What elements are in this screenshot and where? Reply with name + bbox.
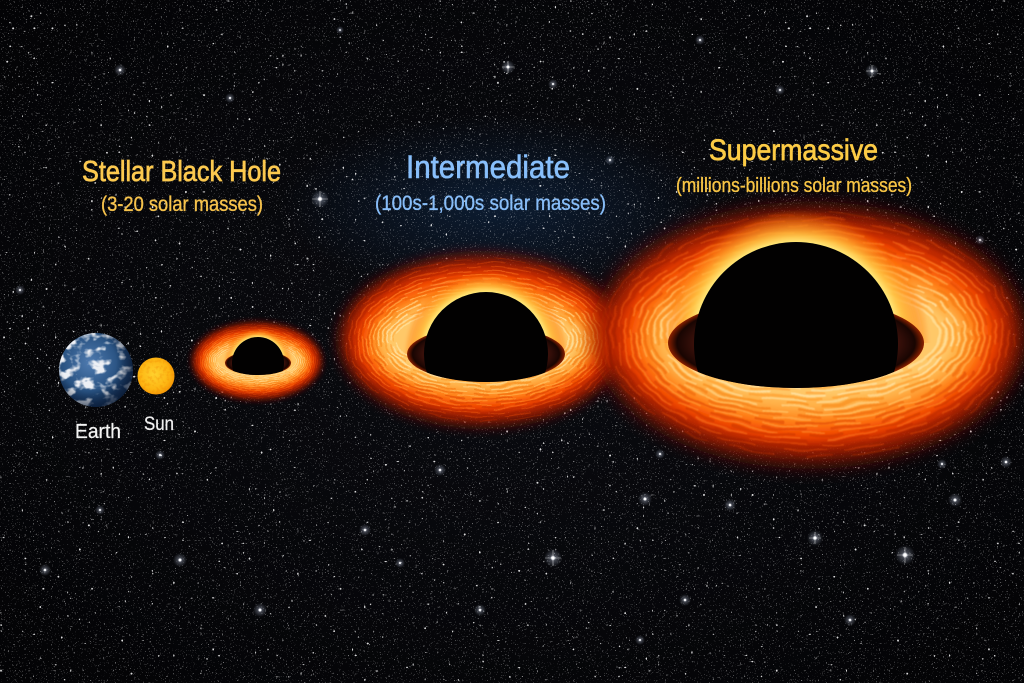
subheading: stellar mass range: (3-20 solar masses): [101, 193, 263, 216]
black hole: supermassive: [592, 203, 1024, 478]
label: Earth: Earth: [75, 421, 121, 443]
icon: Earth: [59, 333, 133, 407]
label: Sun: Sun: [144, 414, 174, 435]
subheading: supermassive mass range: (millions-billions solar masses): [676, 175, 912, 197]
supermassive accretion disk: [592, 203, 1024, 478]
stellar event horizon: [232, 337, 284, 375]
subheading: intermediate mass range: (100s-1,000s solar masses): [375, 192, 606, 215]
supermassive event horizon: [694, 242, 898, 388]
intermediate accretion disk: [336, 252, 628, 436]
heading: Stellar Black Hole: Stellar Black Hole: [82, 156, 281, 188]
intermediate event horizon: [424, 292, 548, 382]
black hole: intermediate: [336, 252, 628, 436]
heading: Supermassive: Supermassive: [709, 134, 878, 167]
icon: Sun: [137, 357, 175, 395]
heading: Intermediate: Intermediate: [406, 149, 570, 185]
stellar accretion disk: [190, 321, 324, 401]
black hole: stellar: [190, 321, 324, 401]
